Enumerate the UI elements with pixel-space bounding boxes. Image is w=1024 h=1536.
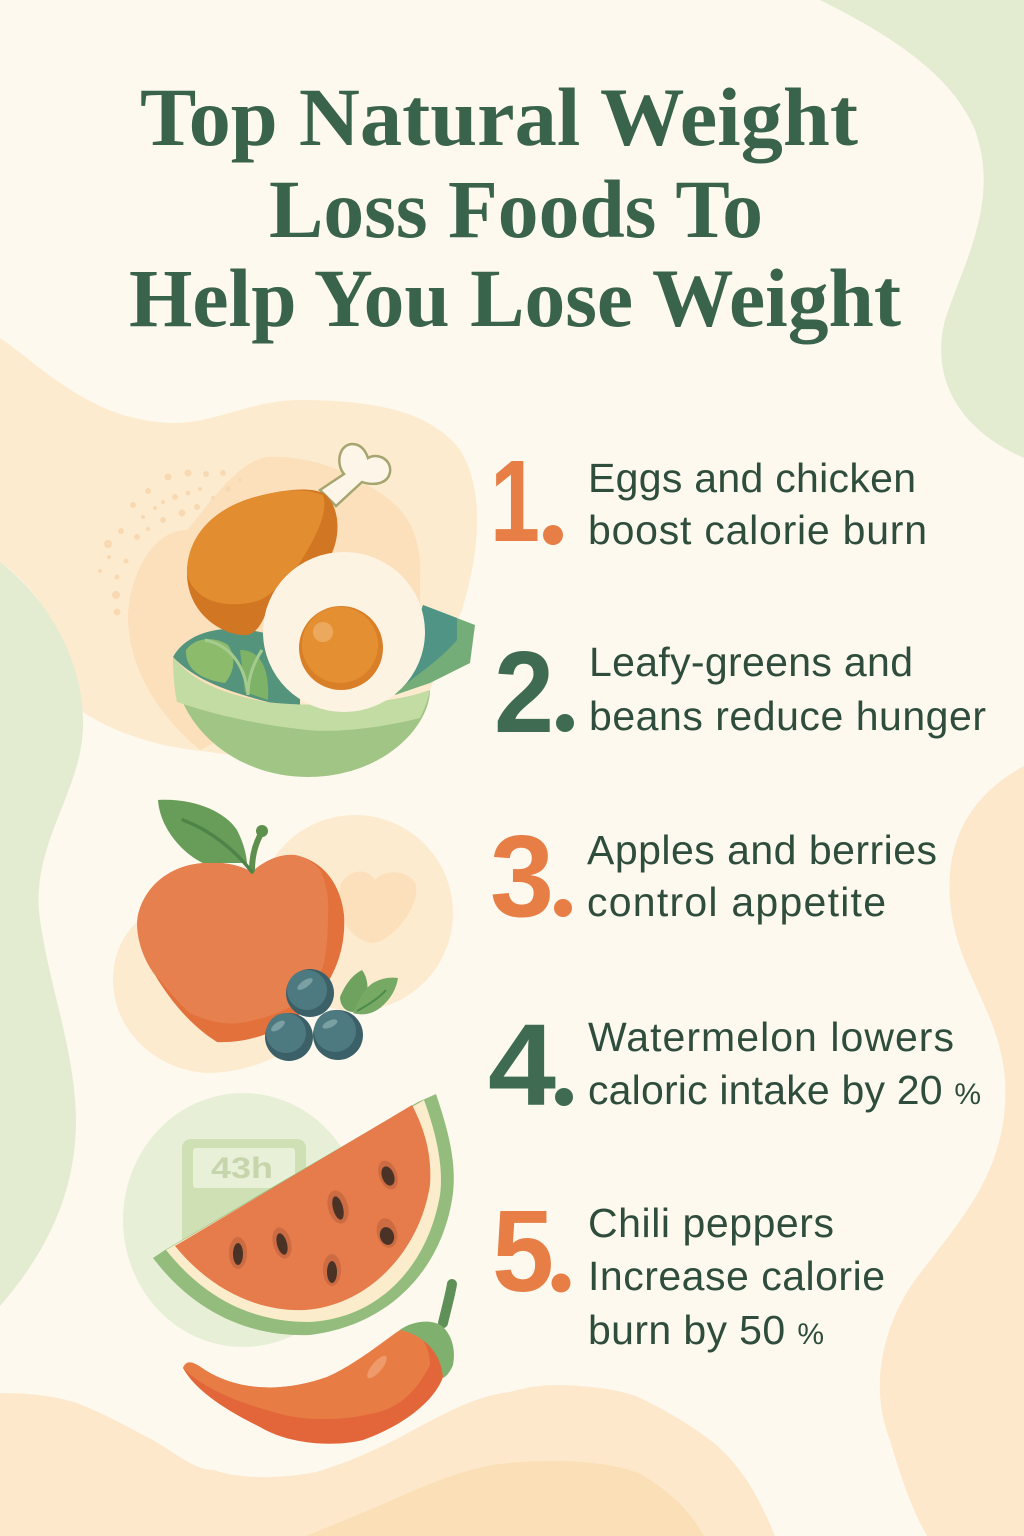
item 5: Increase calorie	[588, 1253, 885, 1299]
item 2	[494, 627, 986, 757]
background shape: left green blob	[0, 562, 83, 1306]
item 1: boost calorie burn	[588, 507, 927, 553]
item 2: Leafy-greens and	[589, 639, 913, 685]
item 5: Chili peppers	[588, 1200, 834, 1246]
item 3: control appetite	[587, 879, 886, 925]
item 1: Eggs and chicken	[588, 455, 916, 501]
egg	[263, 552, 425, 712]
title: Help You Lose Weight	[129, 252, 901, 344]
title: Loss Foods To	[269, 163, 763, 255]
leaf	[158, 800, 247, 863]
item 4	[488, 1000, 981, 1130]
item 4: caloric intake by 20 %	[588, 1067, 981, 1113]
leaves behind bowl	[395, 605, 475, 695]
background shape: upper left peach band	[0, 338, 477, 765]
item 5: 5	[492, 1186, 554, 1316]
illustration: chicken, egg and salad bowl	[98, 444, 475, 777]
item 2: beans reduce hunger	[589, 693, 986, 739]
watermelon	[153, 1094, 454, 1335]
illustration: scale, watermelon and chili	[123, 1093, 454, 1444]
chicken	[187, 490, 338, 635]
apple	[137, 855, 344, 1042]
item 1	[490, 436, 927, 566]
stem	[252, 832, 262, 870]
item 4: Watermelon lowers	[588, 1014, 954, 1060]
item 5	[492, 1186, 885, 1353]
background shape: bottom peach wave	[0, 1385, 775, 1536]
item 4: 4	[488, 1000, 556, 1130]
small leaves	[340, 970, 367, 1012]
background shape: top right green blob	[820, 0, 1024, 458]
bone	[320, 444, 390, 506]
title	[129, 71, 901, 344]
item 3: 3	[490, 811, 554, 941]
title: Top Natural Weight	[140, 71, 858, 163]
blueberries	[286, 969, 334, 1017]
item 5: burn by 50 %	[588, 1307, 824, 1353]
bowl	[173, 657, 430, 777]
background shape: bottom inner wave	[306, 1461, 704, 1536]
scale display: 43h	[211, 1152, 273, 1185]
item 3	[490, 811, 937, 941]
item 1: 1	[490, 436, 540, 566]
scale display	[182, 1139, 306, 1264]
item 2: 2	[494, 627, 554, 757]
illustration: apple and berries	[113, 800, 453, 1073]
chili	[443, 1284, 452, 1323]
background shape: right peach blob	[880, 766, 1024, 1536]
item 3: Apples and berries	[587, 827, 937, 873]
